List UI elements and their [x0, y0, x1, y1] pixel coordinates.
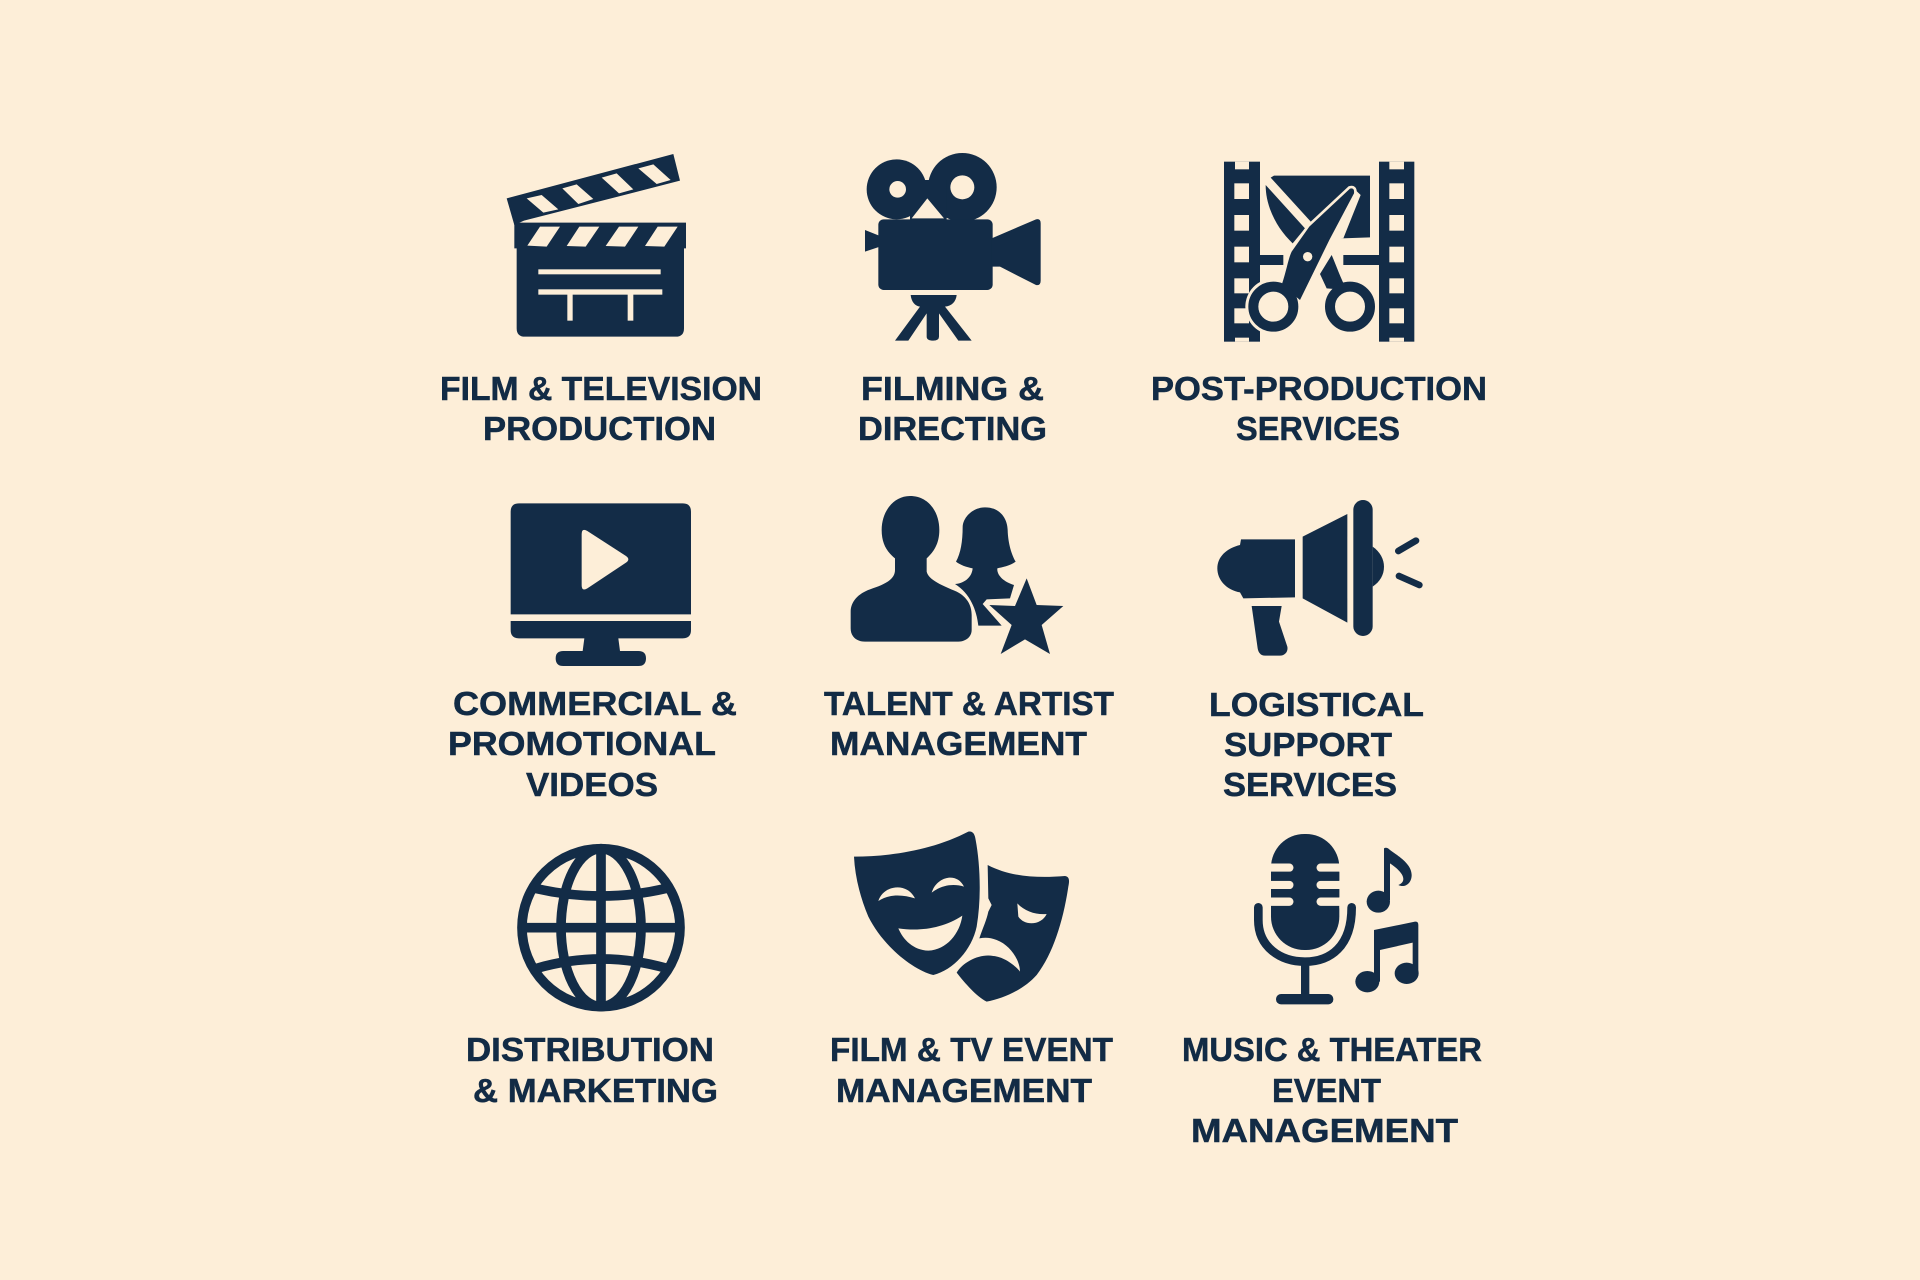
label: music and theater event management: [1182, 1032, 1482, 1150]
label: film and TV event management: FILM & TV EVENT: [830, 1032, 1114, 1069]
label: commercial and promotional videos: [448, 686, 737, 804]
label: commercial and promotional videos: VIDEOS: [526, 767, 658, 804]
panel: talent and artist management: [824, 496, 1115, 763]
label: talent and artist management: [824, 686, 1115, 763]
label: talent and artist management: TALENT & ARTIST: [824, 686, 1115, 723]
label: music and theater event management: MANAGEMENT: [1191, 1113, 1459, 1150]
label: distribution and marketing: [466, 1032, 718, 1110]
icon: two silhouettes with star: [851, 496, 1063, 654]
label: logistical support services: SUPPORT: [1224, 727, 1393, 764]
label: music and theater event management: MUSIC & THEATER: [1182, 1032, 1482, 1069]
label: film and television production: PRODUCTION: [483, 411, 716, 448]
label: filming and directing: [858, 371, 1047, 448]
label: post-production services: SERVICES: [1236, 411, 1400, 448]
icon: movie camera on tripod: [865, 153, 1041, 341]
label: film and TV event management: MANAGEMENT: [836, 1073, 1093, 1110]
icon: theater masks: [854, 832, 1069, 1002]
label: filming and directing: DIRECTING: [858, 411, 1047, 448]
icon: clapperboard: [507, 154, 686, 337]
panel: film and TV event management: [830, 832, 1114, 1110]
label: filming and directing: FILMING &: [861, 371, 1044, 408]
panel: filming and directing: [858, 153, 1047, 448]
panel: film and television production: [440, 154, 762, 448]
label: post-production services: [1151, 371, 1487, 448]
icon: globe: [522, 849, 680, 1007]
label: film and television production: FILM & TELEVISION: [440, 371, 762, 408]
panel: distribution and marketing: [466, 849, 718, 1110]
label: film and TV event management: [830, 1032, 1114, 1110]
label: distribution and marketing: & MARKETING: [473, 1073, 718, 1110]
label: film and television production: [440, 371, 762, 448]
panel: post-production services: [1151, 162, 1487, 448]
panel: logistical support services: [1209, 500, 1424, 804]
label: logistical support services: LOGISTICAL: [1209, 687, 1424, 724]
panel: music and theater event management: [1182, 834, 1482, 1150]
icon: film strip and scissors: [1224, 162, 1414, 342]
label: logistical support services: [1209, 687, 1424, 804]
icon: megaphone: [1217, 500, 1419, 656]
panel: commercial and promotional videos: [448, 503, 737, 804]
label: commercial and promotional videos: COMMERCIAL &: [453, 686, 737, 723]
label: logistical support services: SERVICES: [1223, 767, 1397, 804]
label: music and theater event management: EVENT: [1272, 1073, 1382, 1110]
label: commercial and promotional videos: PROMOTIONAL: [448, 726, 716, 763]
label: post-production services: POST-PRODUCTION: [1151, 371, 1487, 408]
icon: microphone and music notes: [1258, 834, 1419, 1004]
label: distribution and marketing: DISTRIBUTION: [466, 1032, 714, 1069]
icon: monitor with play button: [511, 503, 691, 666]
label: talent and artist management: MANAGEMENT: [830, 726, 1088, 763]
